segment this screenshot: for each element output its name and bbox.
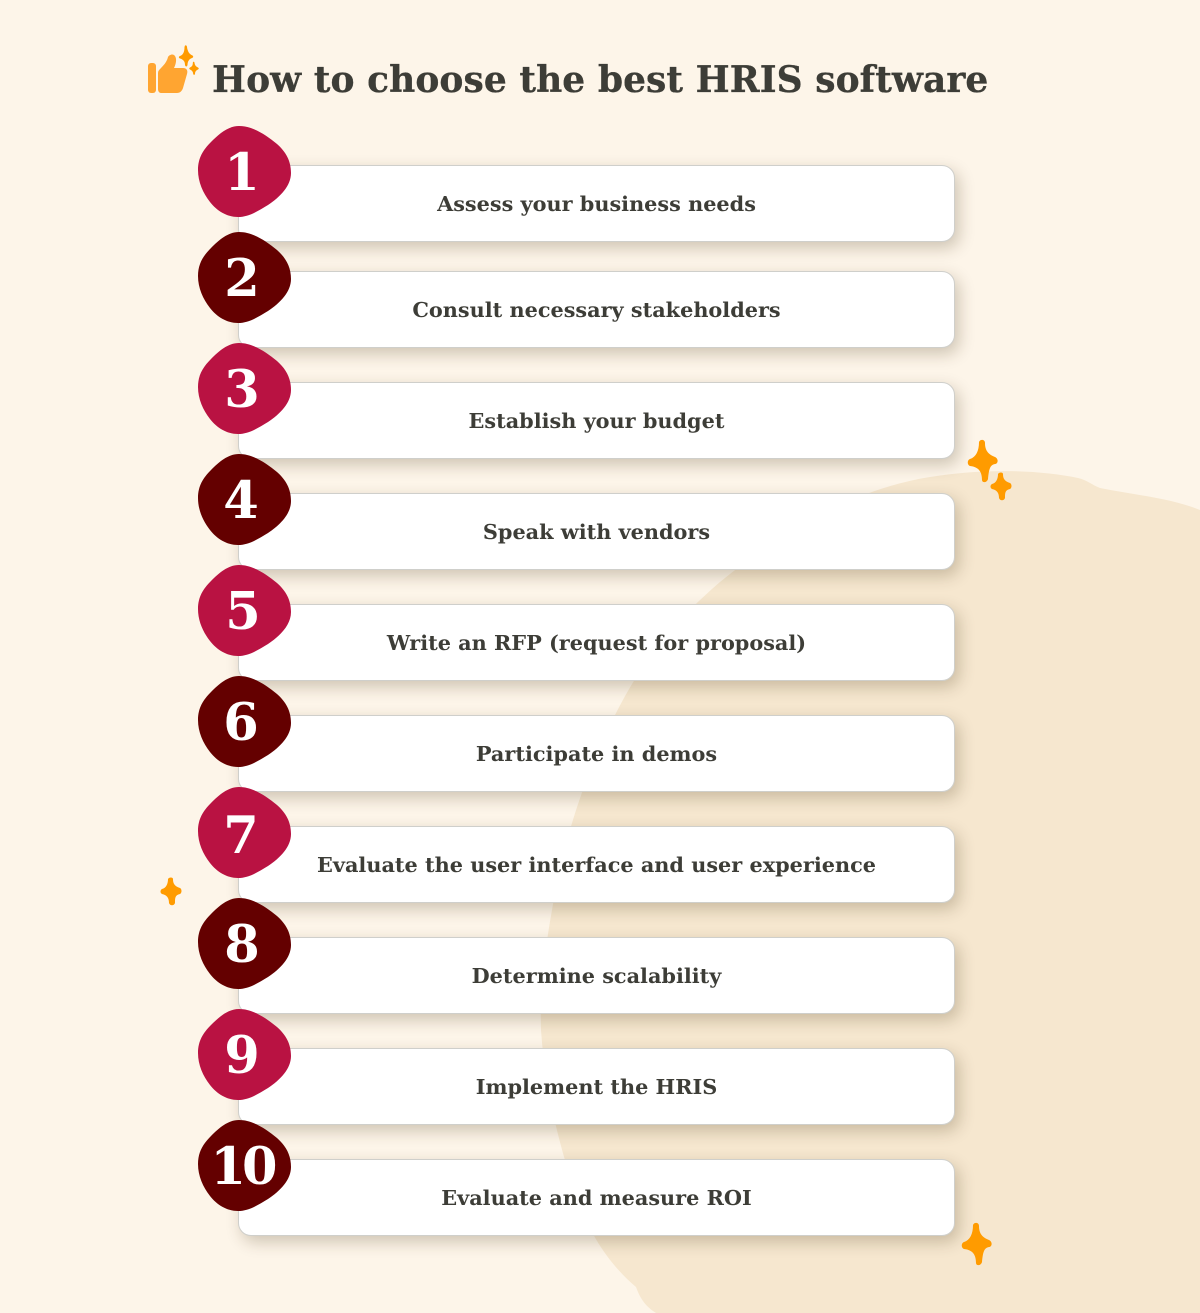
step 6 card: Participate in demos: [476, 741, 717, 766]
sparkle: small upper right: [990, 472, 1012, 500]
sparkle: lower right: [962, 1222, 992, 1266]
step 7 card: Evaluate the user interface and user experience: [317, 852, 876, 877]
step 3 card: [238, 382, 955, 459]
step 7 card: [238, 826, 955, 903]
step 4 number badge: [198, 454, 291, 545]
step 5: [198, 565, 967, 696]
step 5 number badge: [198, 565, 291, 656]
sparkle: left: [160, 878, 182, 906]
step 5 number badge: 5: [225, 582, 261, 642]
step 5 card: Write an RFP (request for proposal): [387, 630, 806, 655]
step 1 number badge: [198, 126, 291, 217]
step 8: [198, 898, 967, 1028]
title: How to choose the best HRIS software: [212, 59, 988, 101]
sparkle: large upper right: [968, 440, 998, 482]
step 7 number badge: [198, 787, 291, 878]
step 4 card: Speak with vendors: [483, 519, 710, 544]
step 7 number badge: 7: [223, 806, 259, 866]
step 6 card: [238, 715, 955, 792]
step 2: [198, 232, 968, 362]
step 3 number badge: 3: [224, 360, 260, 420]
step 6 number badge: [198, 676, 291, 767]
step 9 number badge: [198, 1009, 291, 1100]
step 5 card: [238, 604, 955, 681]
step 9 number badge: 9: [224, 1026, 260, 1086]
title icon: thumbs up with sparkles: [148, 45, 199, 93]
step 10 card: [238, 1159, 955, 1236]
step 2 number badge: [198, 232, 291, 323]
step 3: [198, 343, 968, 474]
step 8 card: Determine scalability: [472, 963, 721, 988]
step 7: [198, 787, 967, 918]
step 1 number badge: 1: [224, 143, 260, 203]
step 10: [198, 1120, 967, 1250]
step 2 number badge: 2: [224, 249, 260, 309]
step 4: [198, 454, 967, 584]
step 1: [198, 126, 968, 256]
step 10 number badge: 10: [211, 1137, 276, 1197]
step 9: [198, 1009, 967, 1140]
step 1 card: [238, 165, 955, 242]
step 1 card: Assess your business needs: [437, 191, 756, 216]
step 2 card: [238, 271, 955, 348]
step 2 card: Consult necessary stakeholders: [412, 297, 781, 322]
step 8 number badge: 8: [224, 915, 260, 975]
step 4 number badge: 4: [223, 471, 259, 531]
step 6 number badge: 6: [223, 693, 259, 753]
step 8 card: [238, 937, 955, 1014]
step 3 number badge: [198, 343, 291, 434]
step 10 number badge: [198, 1120, 291, 1211]
step 6: [198, 676, 967, 806]
step 8 number badge: [198, 898, 291, 989]
step 4 card: [238, 493, 955, 570]
step 9 card: Implement the HRIS: [476, 1074, 717, 1099]
step 3 card: Establish your budget: [469, 408, 724, 433]
step 9 card: [238, 1048, 955, 1125]
step 10 card: Evaluate and measure ROI: [441, 1185, 752, 1210]
